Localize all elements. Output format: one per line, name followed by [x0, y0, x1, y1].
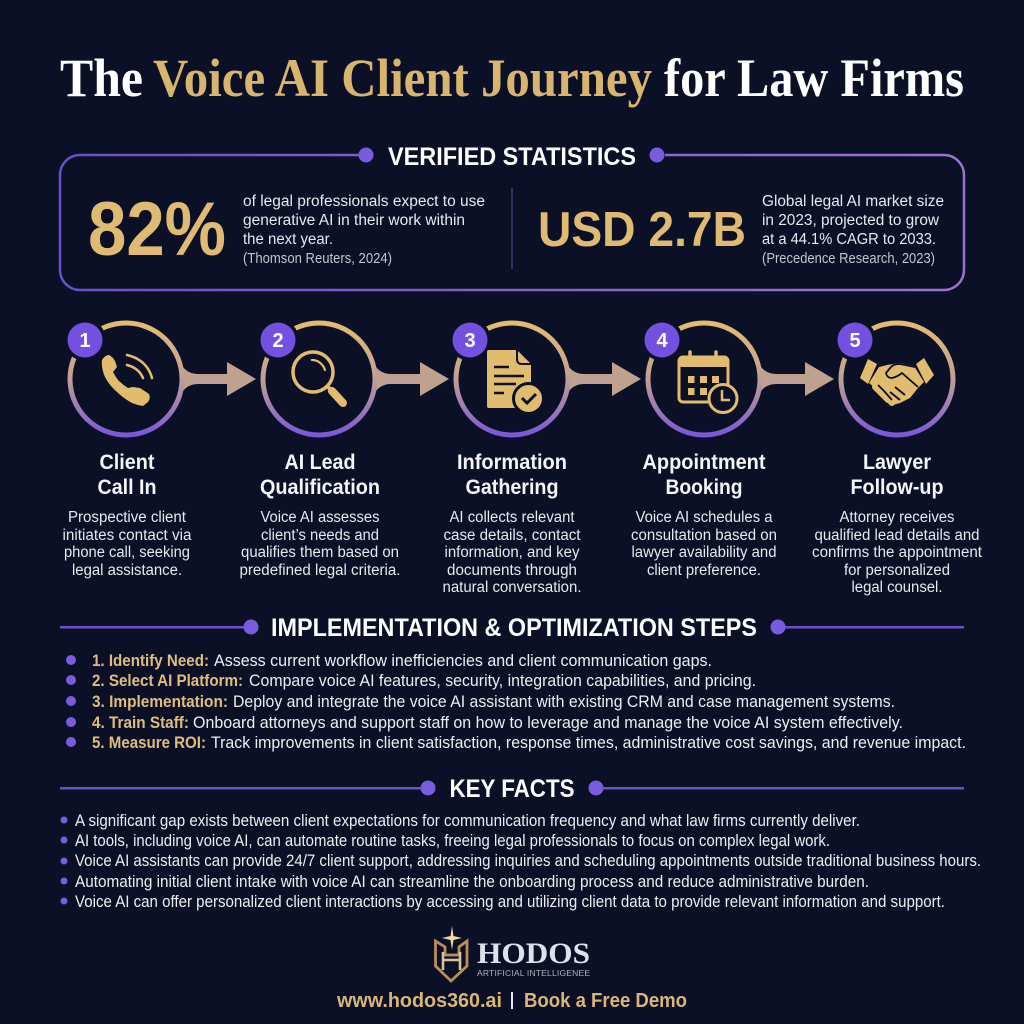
list: implementation steps	[66, 652, 966, 752]
section: implementation steps	[60, 614, 966, 752]
icon: magnifier	[293, 352, 343, 403]
heading: implementation: IMPLEMENTATION & OPTIMIZATION STEPS	[271, 614, 757, 642]
title	[60, 48, 964, 108]
panel: verified statistics	[60, 143, 964, 290]
description: step 3	[442, 509, 582, 596]
list: implementation steps: Onboard attorneys and support staff on how to leverage and manage the voice AI system effectively.	[193, 714, 903, 732]
icon: handshake	[860, 358, 934, 405]
title: Voice AI Client Journey	[153, 48, 652, 108]
title: for Law Firms	[664, 48, 964, 108]
step 1: client call in: 1	[79, 330, 91, 352]
description: step 3: natural conversation.	[442, 579, 582, 596]
label: step 2: AI Lead	[284, 451, 356, 474]
list: implementation steps: Deploy and integrate the voice AI assistant with existing CRM and case management systems.	[233, 693, 895, 711]
label: step 5	[850, 451, 944, 499]
description: step 5: legal counsel.	[852, 579, 942, 596]
stat description: 82%: of legal professionals expect to use	[243, 193, 485, 210]
label: step 5: Follow-up	[850, 476, 944, 499]
stat description: market size: in 2023, projected to grow	[762, 212, 940, 229]
stat description: 82%	[243, 193, 485, 267]
list: implementation steps: Track improvements in client satisfaction, response times, administrative cost savings, and revenue impact.	[211, 734, 966, 752]
list: key facts: Automating initial client intake with voice AI can streamline the onboarding process and reduce administrative burden.	[75, 873, 869, 891]
description: step 4: Voice AI schedules a	[636, 509, 773, 526]
list: key facts	[60, 812, 981, 911]
description: step 5	[812, 509, 983, 596]
label: step 5: Lawyer	[863, 451, 931, 474]
step 4: appointment booking: 4	[656, 330, 668, 352]
step 3: information gathering	[442, 319, 641, 596]
stat description: market size: (Precedence Research, 2023)	[762, 250, 935, 267]
title: The	[60, 48, 143, 108]
label: step 1	[98, 451, 156, 499]
step 5: lawyer follow-up	[812, 319, 983, 596]
description: step 3: AI collects relevant	[450, 509, 575, 526]
list: key facts: Voice AI can offer personalized client interactions by accessing and utilizing client data to provide relevant information and support.	[75, 893, 945, 911]
section: key facts	[60, 775, 981, 911]
step 2: ai lead qualification: 2	[272, 330, 284, 352]
list: implementation steps: 4. Train Staff:	[92, 714, 189, 732]
description: step 5: confirms the appointment	[812, 544, 983, 561]
icon: calendar with clock	[679, 352, 737, 412]
heading: key facts: KEY FACTS	[450, 775, 574, 803]
description: step 4: consultation based on	[631, 527, 777, 544]
stat description: market size	[762, 193, 944, 267]
heading: verified statistics: VERIFIED STATISTICS	[388, 143, 636, 171]
logo: hodos	[436, 926, 590, 981]
description: step 3: case details, contact	[444, 527, 581, 544]
description: step 2: client’s needs and	[261, 527, 379, 544]
footer: website and demo: www.hodos360.ai	[336, 990, 502, 1012]
arrow 2	[371, 358, 449, 400]
description: step 4: lawyer availability and	[632, 544, 776, 561]
list: implementation steps: 3. Implementation:	[92, 693, 228, 711]
step 5: lawyer follow-up: 5	[849, 330, 861, 352]
arrow 1	[178, 358, 256, 400]
arrow 3	[564, 358, 641, 400]
label: step 3: Gathering	[466, 476, 558, 499]
step 1: client call in	[62, 319, 256, 579]
list: implementation steps: Assess current workflow inefficiencies and client communication gaps.	[214, 652, 712, 670]
description: step 2: predefined legal criteria.	[240, 562, 400, 579]
label: step 3	[457, 451, 567, 499]
label: step 2: Qualification	[260, 476, 380, 499]
label: step 1: Call In	[98, 476, 156, 499]
list: key facts: A significant gap exists between client expectations for communication frequency and what law firms currently deliver.	[75, 812, 860, 830]
stat: 82%: 82%	[88, 187, 226, 272]
description: step 4	[631, 509, 777, 579]
stat description: market size: at a 44.1% CAGR to 2033.	[762, 231, 936, 248]
description: step 3: documents through	[447, 562, 577, 579]
stat description: market size: Global legal AI market size	[762, 193, 944, 210]
label: step 4	[642, 451, 766, 499]
description: step 4: client preference.	[647, 562, 761, 579]
icon: shield and star	[436, 926, 467, 981]
description: step 3: information, and key	[444, 544, 580, 561]
description: step 2: qualifies them based on	[241, 544, 399, 561]
logo: hodos: ARTIFICIAL INTELLIGENEE	[477, 968, 590, 978]
arrow 4	[756, 358, 834, 400]
label: step 3: Information	[457, 451, 567, 474]
label: step 4: Booking	[666, 476, 742, 499]
description: step 2: Voice AI assesses	[260, 509, 380, 526]
description: step 2	[240, 509, 400, 579]
step 3: information gathering: 3	[464, 330, 476, 352]
description: step 5: for personalized	[844, 562, 950, 579]
step 2: ai lead qualification	[240, 319, 449, 579]
description: step 5: qualified lead details and	[814, 527, 980, 544]
logo: hodos: HODOS	[477, 937, 590, 970]
step 4: appointment booking	[631, 319, 834, 579]
stat description: 82%: (Thomson Reuters, 2024)	[243, 250, 392, 267]
description: step 1: phone call, seeking	[64, 544, 190, 561]
description: step 5: Attorney receives	[840, 509, 955, 526]
label: step 4: Appointment	[642, 451, 766, 474]
icon: phone	[102, 355, 152, 406]
list: implementation steps: 2. Select AI Platform:	[92, 672, 243, 690]
footer: website and demo: Book a Free Demo	[524, 990, 687, 1012]
stat description: 82%: the next year.	[243, 231, 333, 248]
label: step 1: Client	[100, 451, 154, 474]
list: implementation steps: Compare voice AI features, security, integration capabilities, and pricing.	[249, 672, 756, 690]
footer: website and demo	[336, 990, 687, 1012]
icon: document with check	[487, 350, 544, 414]
stat: USD 2.7B: USD 2.7B	[538, 203, 746, 257]
list: implementation steps: 1. Identify Need:	[92, 652, 209, 670]
label: step 2	[260, 451, 380, 499]
list: implementation steps: 5. Measure ROI:	[92, 734, 206, 752]
stat description: 82%: generative AI in their work within	[243, 212, 465, 229]
description: step 1: legal assistance.	[72, 562, 182, 579]
description: step 1: initiates contact via	[62, 527, 192, 544]
list: key facts: AI tools, including voice AI, can automate routine tasks, freeing legal professionals to focus on complex legal work.	[75, 832, 830, 850]
description: step 1	[62, 509, 192, 579]
description: step 1: Prospective client	[68, 509, 187, 526]
